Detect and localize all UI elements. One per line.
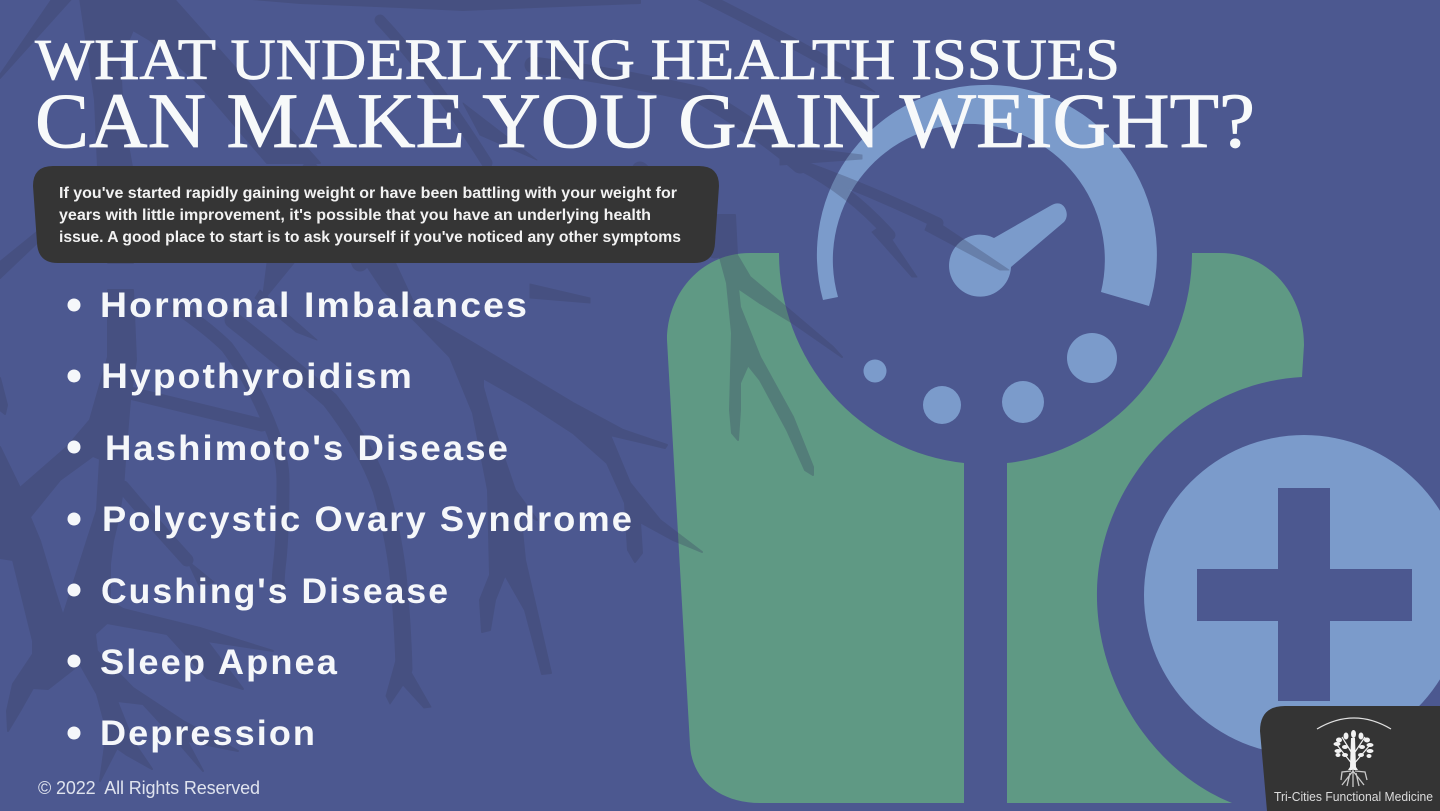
- item: Hashimoto's Disease: Hashimoto's Disease: [105, 429, 510, 468]
- item: Polycystic Ovary Syndrome: Polycystic Ovary Syndrome: [102, 500, 634, 539]
- gauge arc: [817, 85, 1157, 306]
- title line 2: CAN MAKE YOU GAIN WEIGHT?: [35, 77, 1255, 164]
- item: Sleep Apnea: Sleep Apnea: [100, 643, 339, 682]
- logo arc: [1317, 718, 1391, 729]
- logo tree: [1334, 730, 1374, 770]
- title line 1: WHAT UNDERLYING HEALTH ISSUES: [35, 27, 1120, 92]
- gauge dots: [864, 333, 1117, 424]
- logo roots: [1341, 769, 1367, 787]
- intro text: issue. A good place to start is to ask yourself if you've noticed any other symptoms: [59, 229, 681, 246]
- list of health issues: [68, 286, 634, 753]
- intro text: [59, 185, 681, 246]
- intro text: years with little improvement, it's possible that you have an underlying health: [59, 207, 651, 224]
- scale body left: [667, 253, 964, 803]
- logo badge: [1260, 706, 1440, 811]
- item: Depression: Depression: [100, 714, 317, 753]
- copyright: © 2022 All Rights Reserved: [38, 778, 260, 798]
- item: Cushing's Disease: Cushing's Disease: [101, 572, 450, 611]
- intro text: If you've started rapidly gaining weight or have been battling with your weight for: [59, 185, 677, 202]
- icon: bathroom scale: [667, 85, 1304, 803]
- title: [35, 27, 1255, 164]
- item: Hormonal Imbalances: Hormonal Imbalances: [100, 286, 529, 325]
- logo text: Tri-Cities Functional Medicine: [1274, 789, 1433, 804]
- scale body right: [1007, 253, 1304, 803]
- intro callout panel: [33, 166, 719, 263]
- background tree roots: [0, 0, 1009, 781]
- icon: plus circle: [1144, 435, 1440, 755]
- gauge needle: [949, 203, 1067, 297]
- item: Hypothyroidism: Hypothyroidism: [101, 357, 414, 396]
